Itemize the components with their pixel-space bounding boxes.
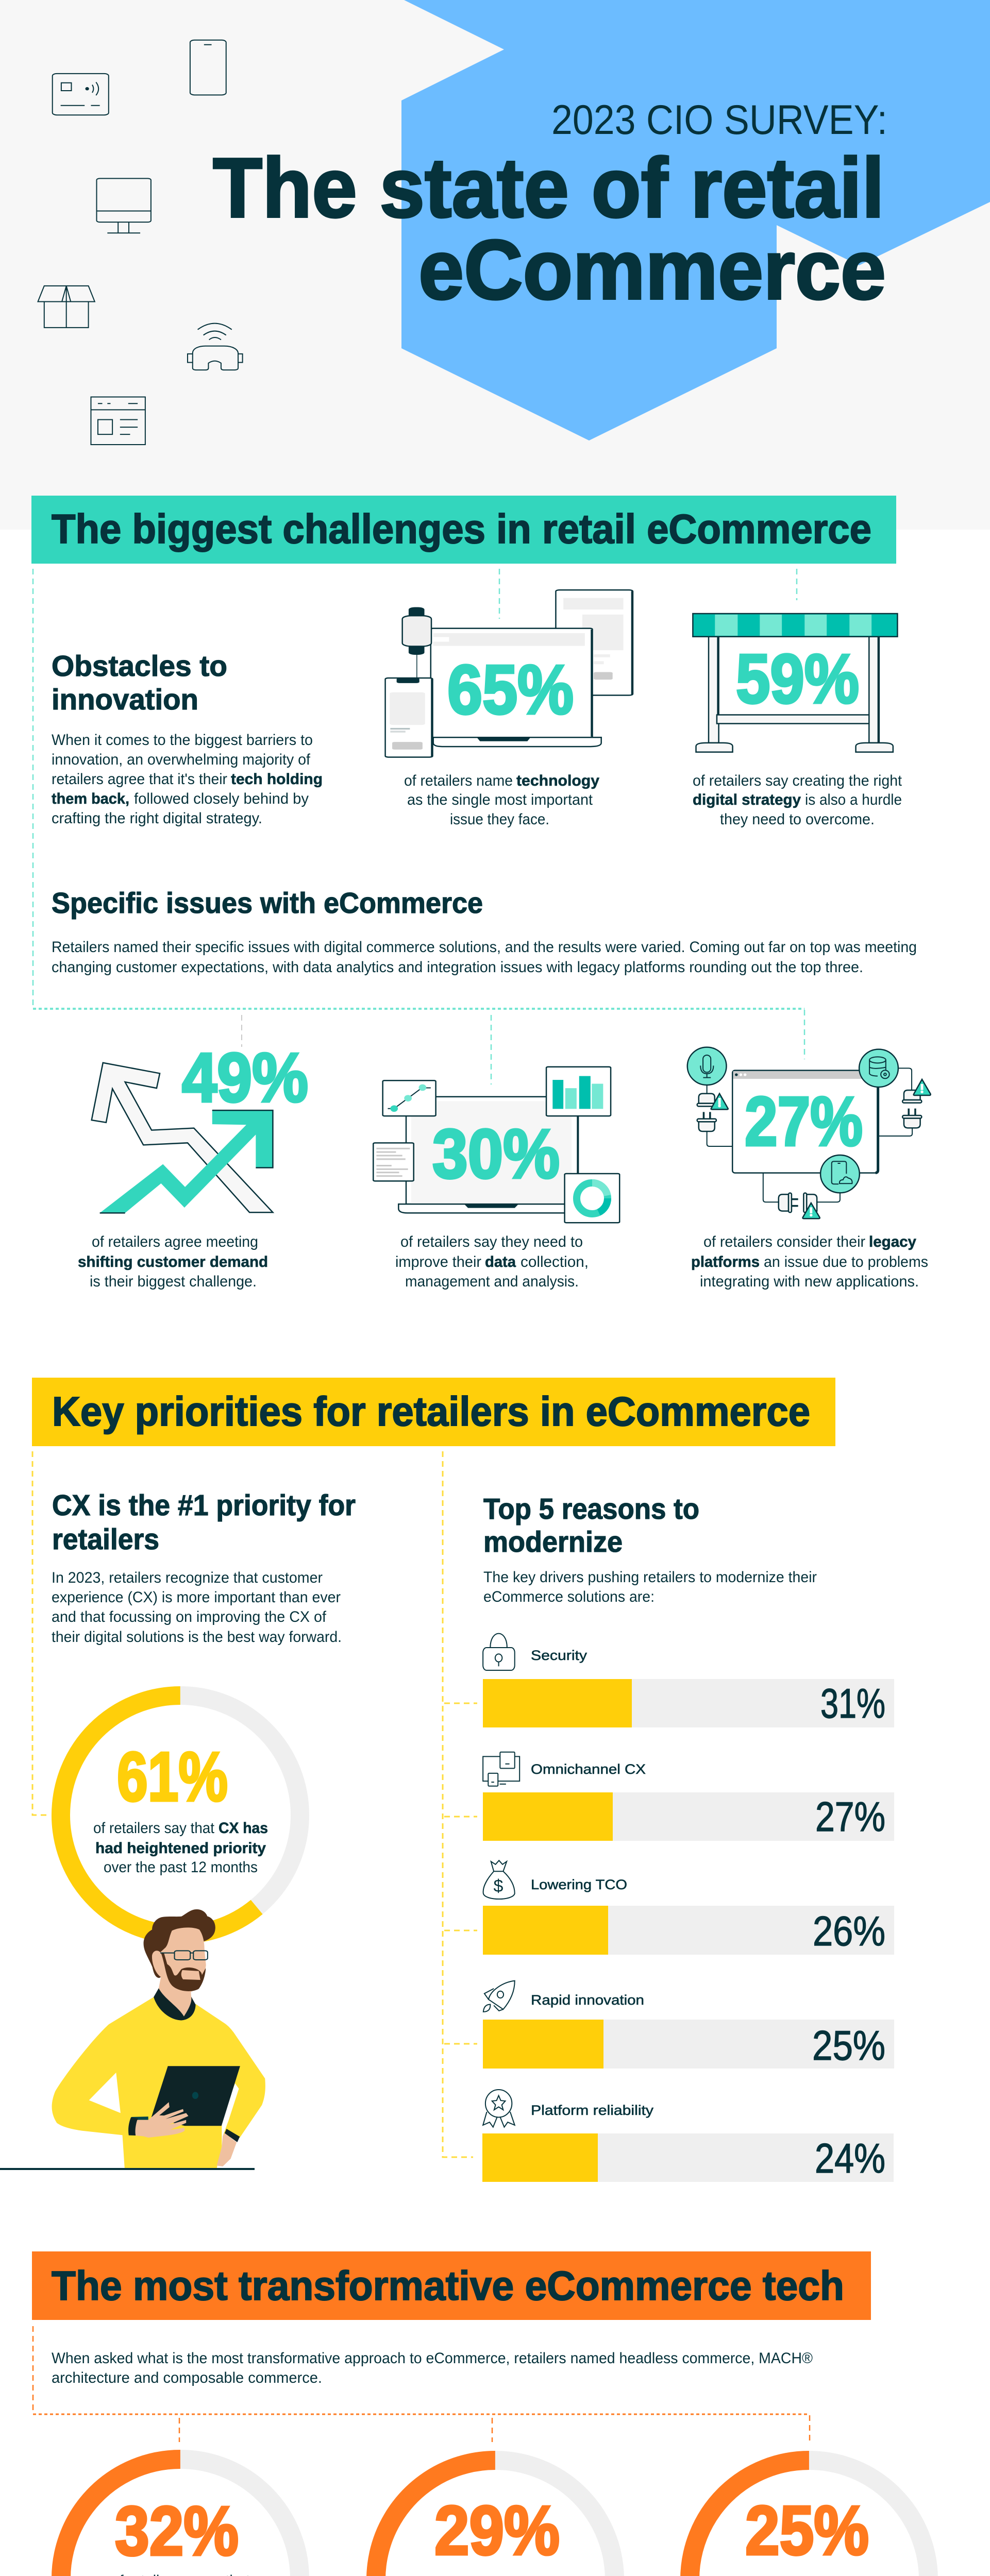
text block: obstacles to innovation: innovation xyxy=(52,683,198,716)
bar row: rapid innovation 25%: Rapid innovation xyxy=(531,1992,644,2008)
bar row: security 31%: 31% xyxy=(820,1681,885,1727)
donut chart: 32% headless xyxy=(22,2420,339,2576)
title xyxy=(213,97,887,317)
caption: of retailers say they need to xyxy=(400,1233,583,1250)
icon: browser with unplugged connectors xyxy=(687,1047,931,1218)
donut chart: 29% MACH xyxy=(350,2434,641,2576)
bar row: lowering TCO 26% xyxy=(483,1860,894,1955)
caption: improve their xyxy=(395,1253,481,1270)
icon: market stand xyxy=(693,614,897,752)
caption: issue they face. xyxy=(450,811,549,828)
title: eCommerce xyxy=(418,223,886,317)
stat: 65% technology xyxy=(385,590,633,828)
text block: top 5 reasons xyxy=(483,1493,817,1605)
caption: of retailers agree meeting xyxy=(92,1233,258,1250)
text block: CX priority: their digital solutions is the best way forward. xyxy=(52,1629,342,1646)
text block: obstacles to innovation xyxy=(52,650,323,827)
bar row: platform reliability 24%: 24% xyxy=(815,2136,885,2182)
donut chart: 32% headless: 32% xyxy=(115,2492,239,2570)
icon: desktop monitor xyxy=(97,178,151,233)
text block: top 5 reasons: modernize xyxy=(483,1526,623,1558)
section banner: transformative tech xyxy=(32,2251,871,2320)
bar row: omnichannel CX 27% xyxy=(483,1752,894,1841)
section banner: key priorities: Key priorities for retailers in eCommerce xyxy=(52,1388,810,1434)
text block: specific issues: changing customer expectations, with data analytics and integration issues with legacy platforms rounding out the top three. xyxy=(52,959,863,976)
icon: padlock xyxy=(483,1634,515,1670)
caption xyxy=(693,772,902,828)
bar row: security 31% xyxy=(483,1634,894,1727)
text block: CX priority: and that focussing on improving the CX of xyxy=(52,1608,327,1625)
text block: specific issues: Specific issues with eCommerce xyxy=(52,887,483,920)
bar row: rapid innovation 25%: 25% xyxy=(812,2023,885,2069)
caption: they need to overcome. xyxy=(720,811,875,828)
caption: digital strategy xyxy=(693,791,801,808)
icon: donut chart xyxy=(577,1183,608,1214)
stat: 30% data: 30% xyxy=(432,1115,560,1193)
donut chart: 25% composable xyxy=(690,2461,929,2576)
icon: laptop with charts xyxy=(373,1067,619,1223)
bar row: omnichannel CX 27%: 27% xyxy=(815,1794,885,1840)
caption: of retailers say that xyxy=(93,1820,215,1837)
donut chart: 61% CX priority: 61% xyxy=(117,1738,228,1816)
stat: 59% digital strategy: 59% xyxy=(736,640,859,718)
bar row: rapid innovation 25% xyxy=(483,1981,894,2069)
text block: CX priority: CX is the #1 priority for xyxy=(52,1489,356,1522)
text block: transformative intro: When asked what is the most transformative approach to eCommerce, retailers named headless commerce, MACH® xyxy=(52,2350,813,2367)
stat: 49% customer demand: 49% xyxy=(182,1039,308,1116)
section banner: transformative tech: The most transformative eCommerce tech xyxy=(52,2263,844,2309)
caption: integrating with new applications. xyxy=(700,1273,919,1290)
caption: is also a hurdle xyxy=(805,791,902,808)
caption: as the single most important xyxy=(407,791,593,808)
icon: payment card xyxy=(53,74,109,115)
caption: shifting customer demand xyxy=(78,1253,268,1270)
donut chart: 25% composable: 25% xyxy=(745,2492,869,2569)
section banner: challenges xyxy=(31,496,896,564)
icon: award rosette xyxy=(483,2090,515,2127)
stat: 30% data xyxy=(373,1067,619,1290)
icon: zig-zag arrows xyxy=(92,1063,273,1213)
icon: screens xyxy=(483,1752,519,1786)
stat: 27% legacy platforms xyxy=(687,1047,931,1290)
icon: browser window xyxy=(91,397,145,445)
stat: 49% customer demand xyxy=(78,1039,308,1290)
text block: obstacles to innovation: Obstacles to xyxy=(52,650,227,683)
icon: connected headset xyxy=(188,324,243,370)
caption xyxy=(691,1233,928,1290)
stat: 65% technology: 65% xyxy=(447,651,574,728)
caption: of retailers consider their xyxy=(703,1233,865,1250)
caption xyxy=(404,772,599,828)
text block: CX priority: In 2023, retailers recognize that customer xyxy=(52,1569,323,1586)
illustration: man with tablet xyxy=(52,1909,265,2168)
caption: of retailers say creating the right xyxy=(693,772,902,789)
caption: collection, xyxy=(521,1253,589,1270)
icon: smartphone xyxy=(190,40,226,95)
text block: obstacles to innovation: crafting the right digital strategy. xyxy=(52,810,262,827)
bar row: lowering TCO 26%: 26% xyxy=(813,1908,885,1955)
text block: specific issues: Retailers named their specific issues with digital commerce solutions, and the results were varied. Coming out far on top was meeting xyxy=(52,939,917,956)
floor line xyxy=(0,2168,255,2170)
stat: 27% legacy platforms: 27% xyxy=(745,1082,863,1160)
icon: money bag xyxy=(483,1860,515,1899)
caption: CX has xyxy=(219,1820,268,1837)
caption: an issue due to problems xyxy=(764,1253,928,1270)
text block: obstacles to innovation: them back, xyxy=(52,790,129,807)
caption xyxy=(78,1233,268,1290)
title: The state of retail xyxy=(213,141,884,235)
text block: top 5 reasons: eCommerce solutions are: xyxy=(483,1588,655,1605)
header panel xyxy=(0,0,990,530)
donut chart: 61% CX priority xyxy=(12,1647,349,1984)
caption: management and analysis. xyxy=(405,1273,579,1290)
bar row: lowering TCO 26%: Lowering TCO xyxy=(531,1877,627,1892)
text block: obstacles to innovation: retailers agree that it's their xyxy=(52,771,227,788)
text block: top 5 reasons: The key drivers pushing retailers to modernize their xyxy=(483,1569,817,1586)
section banner: challenges: The biggest challenges in retail eCommerce xyxy=(52,506,871,552)
caption: legacy xyxy=(869,1233,916,1250)
icon: rocket xyxy=(483,1981,515,2012)
text block: obstacles to innovation: followed closely behind by xyxy=(134,790,309,807)
title: 2023 CIO SURVEY: xyxy=(551,97,887,143)
text block: obstacles to innovation: innovation, an overwhelming majority of xyxy=(52,751,311,768)
stat: 59% digital strategy xyxy=(693,614,902,828)
text block: obstacles to innovation: tech holding xyxy=(231,771,323,788)
text block: CX priority: retailers xyxy=(52,1523,159,1556)
text block: obstacles to innovation: When it comes to the biggest barriers to xyxy=(52,732,313,749)
caption: is their biggest challenge. xyxy=(90,1273,257,1290)
caption: over the past 12 months xyxy=(104,1859,258,1876)
caption: had heightened priority xyxy=(95,1840,266,1857)
donut chart: 29% MACH: 29% xyxy=(434,2492,560,2569)
caption: of retailers name xyxy=(404,772,513,789)
text block: CX priority: experience (CX) is more important than ever xyxy=(52,1589,341,1606)
text block: transformative intro: architecture and composable commerce. xyxy=(52,2369,322,2386)
bar row: platform reliability 24% xyxy=(482,2090,894,2182)
section banner: key priorities xyxy=(32,1378,835,1446)
text block: top 5 reasons: Top 5 reasons to xyxy=(483,1493,699,1526)
caption: platforms xyxy=(691,1253,760,1270)
bar row: omnichannel CX 27%: Omnichannel CX xyxy=(531,1761,646,1777)
caption xyxy=(93,1820,268,1876)
icon: parcel box xyxy=(38,286,95,328)
icon: money bag: $ xyxy=(494,1876,504,1896)
icon: devices illustration xyxy=(385,590,633,757)
caption xyxy=(395,1233,589,1290)
bar row: platform reliability 24%: Platform reliability xyxy=(531,2103,654,2118)
caption: data xyxy=(485,1253,516,1270)
bar row: security 31%: Security xyxy=(531,1648,588,1663)
text block: CX priority xyxy=(52,1489,356,1646)
text block: transformative intro xyxy=(52,2350,813,2386)
caption: technology xyxy=(516,772,599,789)
blue arrow background shape xyxy=(401,0,990,440)
text block: specific issues xyxy=(52,887,917,976)
